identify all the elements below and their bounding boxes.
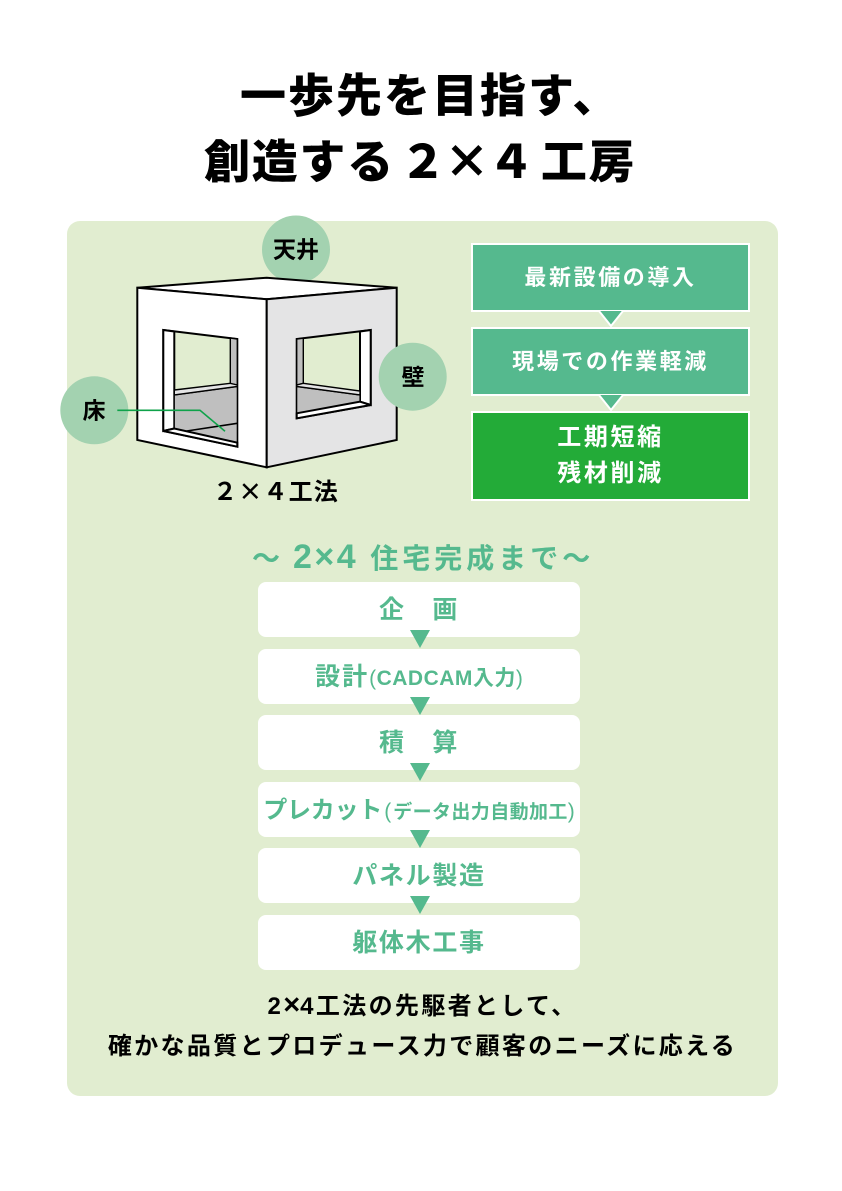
- step: planning: [258, 582, 580, 637]
- arrow: flow 1: [410, 630, 430, 648]
- arrow: box 2 to 3: [598, 395, 624, 411]
- title: 創造する２×４工房: [204, 126, 636, 192]
- caption: 2x4 method: ２×４工法: [213, 472, 339, 507]
- box: results: [471, 411, 750, 501]
- arrow: flow 3: [410, 763, 430, 781]
- step: panel manufacture: [258, 848, 580, 903]
- label circle: wall: [379, 343, 447, 411]
- closing statement: [108, 989, 737, 1060]
- step: estimation: [258, 715, 580, 770]
- closing statement: 2×4工法の先駆者として、: [268, 989, 577, 1021]
- panel: main background: [67, 221, 778, 1096]
- box: on-site reduction: [471, 327, 750, 396]
- step: planning: 企 画: [379, 596, 459, 624]
- arrow: box 1 to 2: [598, 311, 624, 327]
- heading: until completion: ～ 2×4 住宅完成まで～: [252, 538, 594, 576]
- arrow: flow 2: [410, 697, 430, 715]
- label circle: wall: 壁: [402, 364, 424, 390]
- box: results: 残材削減: [557, 460, 664, 487]
- right window: [297, 330, 371, 418]
- step: precut: プレカット(データ出力自動加工): [263, 797, 575, 824]
- box: new equipment: [471, 243, 750, 312]
- step: framing: [258, 915, 580, 970]
- label circle: floor: 床: [82, 398, 106, 424]
- label circle: floor: [60, 376, 128, 444]
- step: panel manufacture: パネル製造: [352, 862, 486, 890]
- box: on-site reduction: 現場での作業軽減: [512, 349, 709, 374]
- step: framing: 躯体木工事: [352, 929, 486, 957]
- closing statement: 確かな品質とプロデュース力で顧客のニーズに応える: [108, 1033, 737, 1060]
- left window: [163, 330, 237, 447]
- title: 一歩先を目指す、: [240, 70, 620, 122]
- arrow: flow 4: [410, 830, 430, 848]
- step: precut: [258, 782, 580, 837]
- cube diagram: [60, 216, 447, 507]
- step: estimation: 積 算: [379, 729, 459, 757]
- step: design: 設計(CADCAM入力): [315, 663, 523, 691]
- cube body: [137, 278, 397, 467]
- title: [204, 70, 636, 192]
- step: design: [258, 649, 580, 704]
- box: results: 工期短縮: [557, 424, 664, 451]
- label circle: ceiling: 天井: [273, 236, 319, 262]
- label circle: ceiling: [262, 216, 330, 284]
- arrow: flow 5: [410, 896, 430, 914]
- leader line: floor: [117, 410, 225, 431]
- box: new equipment: 最新設備の導入: [524, 265, 697, 290]
